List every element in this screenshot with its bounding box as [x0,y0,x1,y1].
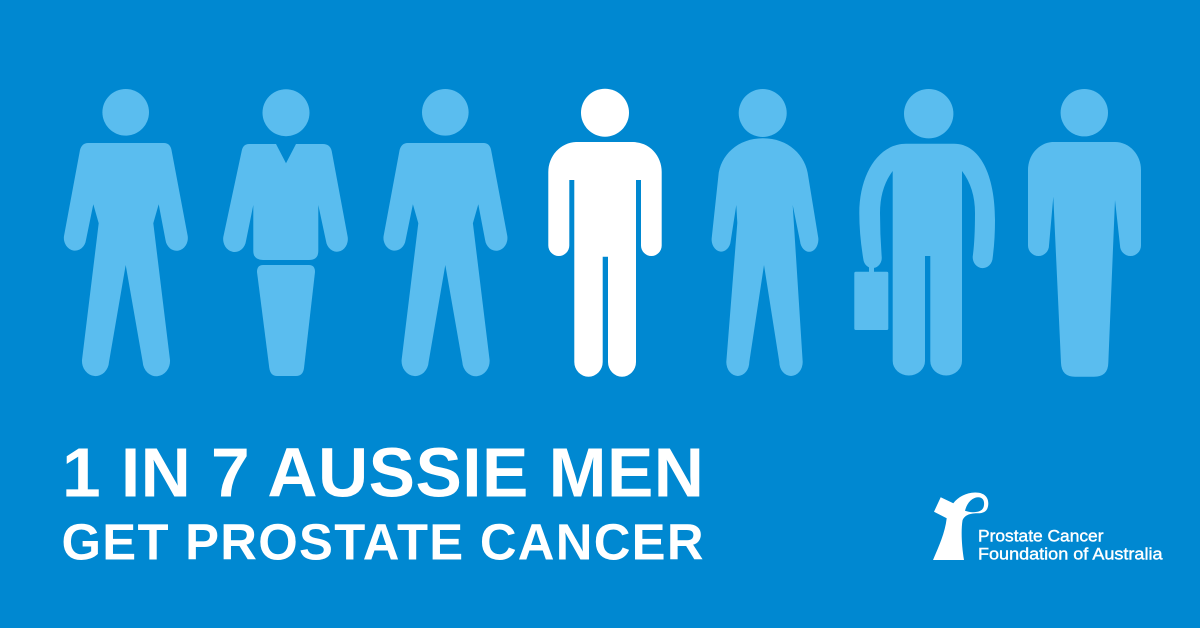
logo name line 1: Prostate Cancer [978,527,1104,546]
icon: briefcase [854,264,888,330]
headline [62,434,704,570]
figure 1: man, slim [64,89,188,376]
figure 4: highlighted white man [548,89,662,377]
logo: Prostate Cancer Foundation of Australia [933,492,1163,563]
row of seven male figures [64,89,1141,377]
logo name line 2: Foundation of Australia [978,544,1163,563]
figure 2: person with skirt and V-neck [223,89,348,376]
figure 3: man, slim [383,89,507,376]
headline line 2: GET PROSTATE CANCER [62,513,704,570]
figure 6: man carrying a briefcase [854,89,995,376]
figure 5: rounded-shoulder man [712,89,818,376]
icon: ribbon [933,492,988,560]
figure 7: man in robe [1028,89,1141,377]
headline line 1: 1 IN 7 AUSSIE MEN [62,434,704,512]
